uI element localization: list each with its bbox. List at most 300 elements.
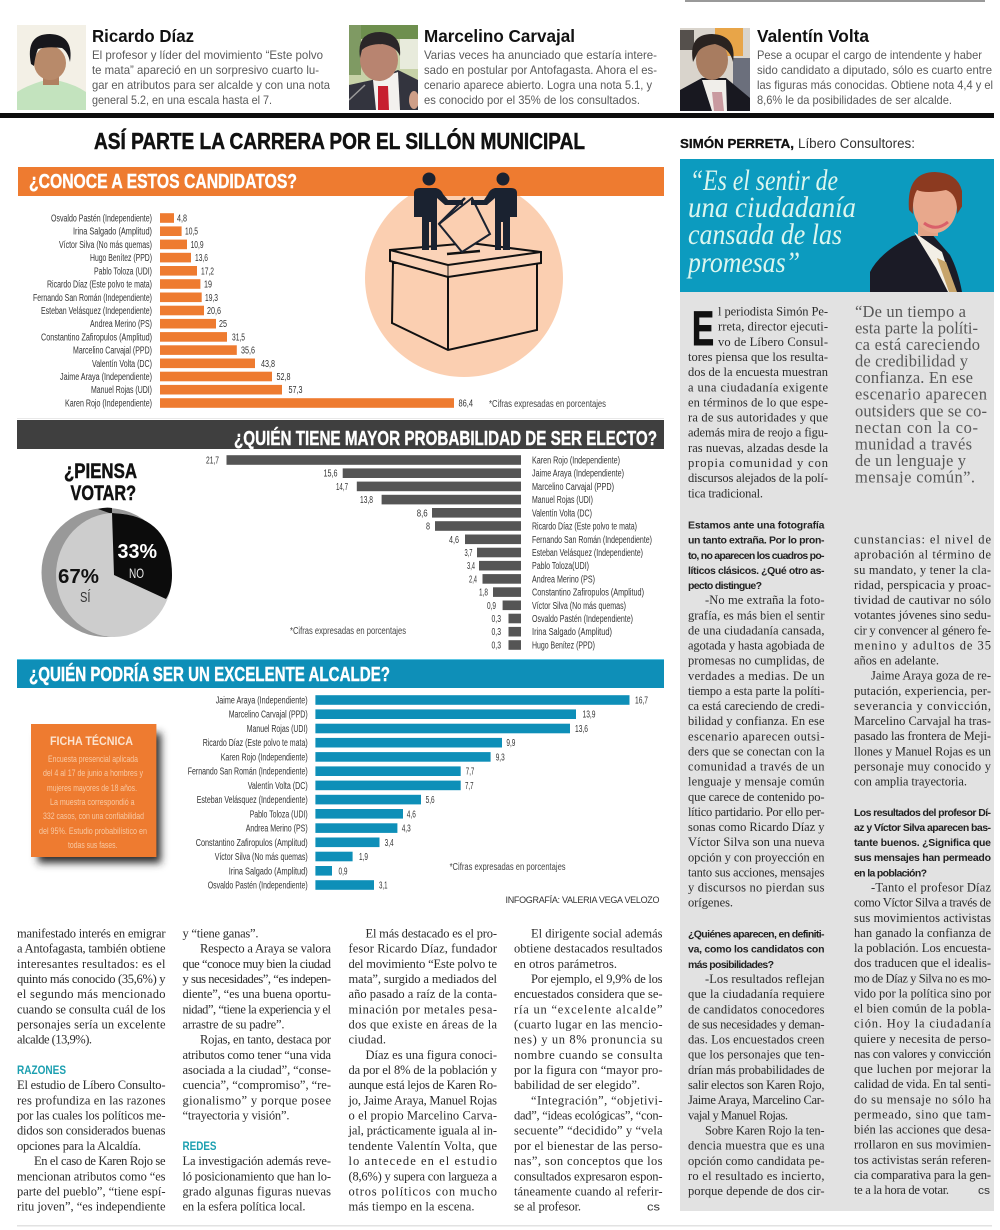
values: 4,3 [402,824,411,835]
candidate labels: Pablo Toloza (UDI) [250,809,308,820]
values: 14,7 [336,482,348,493]
article text: column 4: se al profesor. [514,1200,581,1214]
panel: conoce a estos candidatos [18,167,664,410]
article text: column 3: da por el 8% de la población y [348,1063,498,1077]
ficha text: Encuesta presencial aplicada [48,754,139,765]
interview column 2: como Víctor Silva a través de [854,896,991,910]
pie heading: VOTAR? [70,482,136,505]
candidate labels: Víctor Silva (No más quemas) [215,852,308,863]
article text: column 3: mata”, surgido a mediados del [348,972,498,986]
chart: ¿piensa votar? pie [42,460,172,637]
question and answer 1: lenguaje y mensaje común [688,775,825,789]
article text: column 1: cuando se consulta cuál de los [17,1002,166,1016]
article text: column 2: arrastre de su padre”. [182,1018,284,1032]
icon: ballot box with two people [390,172,541,350]
headline quote: cansada de las [688,218,842,251]
candidate labels [188,696,308,892]
interview column 2: la población. Los encuesta- [854,941,991,955]
section heading: ¿QUIÉN TIENE MAYOR PROBABILIDAD DE SER ELECTO? [234,427,657,450]
candidate labels: Irina Salgado (Amplitud) [532,627,612,638]
candidate labels: Ricardo Díaz (Este polvo te mata) [203,738,308,749]
interview column 2: -Tanto el profesor Díaz [871,880,991,894]
candidate labels: Jaime Araya (Independiente) [532,469,624,480]
candidate labels: Valentín Volta (DC) [532,508,592,519]
interview column 2: te a la hora de votar. [854,1183,949,1197]
article text: column 4: táneamente cuando al referir- [514,1184,662,1198]
candidate labels [33,214,152,410]
pull quote: ca está careciendo [855,335,980,354]
article text: column 4: dad”, “ideas ecológicas”, “con- [514,1109,662,1123]
interview column 2: nas con valores y convicción [854,1047,992,1061]
candidate labels: Hugo Benítez (PPD) [90,253,152,264]
question and answer 1: verdades a medias. De un [688,669,825,683]
ficha heading: FICHA TÉCNICA [50,733,133,748]
candidate labels: Osvaldo Pastén (Independiente) [51,214,152,224]
ficha text: La muestra correspondió a [50,797,135,808]
article text: column 2: y “tiene ganas”. [182,926,258,940]
values [206,456,501,652]
question and answer 1: opción y con proyección en [688,850,825,864]
intro paragraph: discursos alejados de la polí- [688,471,828,485]
interview column 2: putación, experiencia, per- [854,684,991,698]
pull quote: escenario aparecen [855,385,987,404]
article text: column 3: jal, prácticamente iguala al in- [348,1124,497,1138]
candidate labels: Irina Salgado (Amplitud) [73,227,152,238]
article text: column 1: parte del pueblo”, “tiene espí- [17,1184,166,1198]
article text: column 3: lo antecede en el estudio [348,1154,497,1168]
question and answer 2: Sobre Karen Rojo la ten- [705,1124,824,1138]
intro paragraph: tores piensa que los resulta- [688,350,828,364]
values: 43,8 [261,359,275,370]
candidate labels: Víctor Silva (No más quemas) [59,240,152,251]
question and answer 1: lítico partidario. Por ello per- [688,805,824,819]
interview column 2: calidad de vida. En tal senti- [854,1077,991,1091]
article text: column 2: “trayectoria y visión”. [182,1109,290,1123]
label: 67% sí [58,566,99,606]
photo: Valentín Volta [680,28,750,111]
footnote: *Cifras expresadas en porcentajes [290,626,406,637]
article text: column 4: por la figura con “mayor pro- [514,1063,662,1077]
interview column 2: severancia y convicción, [854,699,991,713]
values: 13,6 [575,724,588,735]
values: 17,2 [201,266,214,277]
article text: column 1 [17,926,166,1214]
values: 13,9 [582,710,596,721]
article text: column 3: jo, Jaime Araya, Manuel Rojas [348,1093,497,1107]
question and answer 1: agotada y hasta agobiada de [688,638,825,652]
profile: Marcelino Carvajal [349,25,657,110]
ficha text [39,754,147,851]
values [338,696,648,892]
interview column 2: cia comparativa para la gen- [854,1168,991,1182]
section header bar [17,420,664,449]
interview column 2: sus movimientos activistas [854,911,991,925]
article text: column 4: ría un “excelente alcalde” [514,1002,662,1016]
article text: column 2: diente”, “es una buena oportu- [182,987,331,1001]
article text: column 1: quinto más conocido (35,6%) y [17,972,166,986]
values: 8,6 [417,508,428,519]
description [92,48,330,107]
question and answer 1: ders que se conectan con la [688,744,825,758]
question and answer 1: tiempo a esta parte la políti- [688,684,824,698]
description: te mata” apareció en un sorpresivo cuarto lu- [92,63,319,77]
article text: column 2: gionalismo” y porque posee [182,1093,331,1107]
values: 13,6 [195,253,208,264]
question 3: az y Víctor Silva aparecen bas- [854,822,992,834]
interview column 2: con amplia trayectoria. [854,775,967,789]
profile: Ricardo Díaz [17,25,330,110]
question and answer 2: Jaime Araya, Marcelino Car- [688,1093,824,1107]
interview column 2: ridad, perspicacia y proac- [854,578,991,592]
question and answer 1: que carece de contenido po- [688,790,824,804]
end mark: cs [978,1185,991,1197]
intro paragraph: rreta, director ejecuti- [718,320,828,334]
candidate labels: Marcelino Carvajal (PPD) [532,482,614,493]
description: Pese a ocupar el cargo de intendente y haber [757,48,982,62]
interview column 2: personaje muy conocido y [854,759,992,773]
article text: column 2: que “conoce muy bien la ciudad [182,957,332,971]
interview column 2: pasado las frontera de Meji- [854,729,991,743]
article text: column 4: babilidad de ser elegido”. [514,1078,640,1092]
values: 9,9 [506,738,516,749]
interview column 2: llones y Manuel Rojas es un [854,744,992,758]
question and answer 1: orígenes. [688,896,733,910]
article text: column 1: alcalde (13,9%). [17,1033,92,1047]
headline quote: “Es el sentir de [690,164,838,197]
candidate labels: Pablo Toloza(UDI) [532,561,589,572]
bars [315,695,630,890]
candidate labels: Marcelino Carvajal (PPD) [73,346,152,357]
article text: column 4: consultados expresaron espon- [514,1169,662,1183]
candidate labels: Esteban Velásquez (Independiente) [197,795,308,806]
values: 86,4 [458,398,473,410]
panel: excelente alcalde [17,660,664,905]
interview column 2: que luchen por mejorar la [854,1062,991,1076]
candidate labels: Esteban Velásquez (Independiente) [532,548,643,559]
article text: column 4: por el bienestar de las perso- [514,1139,662,1153]
question and answer 2: drían más probabilidades de [688,1063,825,1077]
values: 10,9 [191,240,204,251]
values: 2,4 [469,574,477,585]
values: 0,3 [492,614,501,625]
interview column 2: Jaime Araya goza de re- [871,669,991,683]
question 1: líticos clásicos. ¿Qué otro as- [688,565,825,577]
bars [160,213,454,408]
pull quote: mensaje común”. [855,468,975,486]
pull quote: munidad a través [855,434,972,453]
photo: Marcelino Carvajal [349,25,419,110]
question 1 [688,520,825,592]
question and answer 2: das. Los encuestados creen [688,1033,825,1047]
candidate labels: Andrea Merino (PS) [532,574,595,585]
section header bar [17,660,664,688]
values: 31,5 [232,332,245,343]
footnote: *Cifras expresadas en porcentajes [489,399,606,410]
interview column 2: su mandato, y tener la cla- [854,563,991,577]
photo: Simón Perreta [870,172,963,292]
values: 5,6 [426,795,435,806]
question and answer 1: sonas como Ricardo Díaz y [688,820,825,834]
interview column 2: tividad de cautivar no sólo [854,593,991,607]
values: 52,8 [276,372,291,383]
article text: column 1: opciones para la Alcaldía. [17,1139,141,1153]
values: 19,3 [205,293,218,304]
candidate labels: Hugo Benítez (PPD) [532,640,595,652]
article text: column 4: encuestados considera que se- [514,987,662,1001]
profile: Valentín Volta [680,26,993,111]
question 2 [688,928,825,971]
candidate labels: Fernando San Román (Independiente) [188,767,308,778]
callout: ficha técnica [31,724,161,863]
values: 16,7 [635,696,648,706]
question 3: en la población? [854,867,927,879]
question and answer 2: que los personajes que ten- [688,1048,824,1062]
article text: column 3: otros políticos con mucho [348,1184,497,1198]
values: 20,6 [207,306,221,317]
article text: column 4: (cuarto lugar en las mencio- [514,1018,662,1032]
description [424,48,657,107]
label: 33% no: NO [129,565,144,581]
drop cap: E [692,303,714,356]
question 2: más posibilidades? [688,959,774,971]
question and answer 1: promesas no cumplidas, de [688,654,825,668]
article text: column 1: personajes sería un excelente [17,1018,166,1032]
description: Varias veces ha anunciado que estaría intere- [424,48,657,62]
interview column 2: años en adelante. [854,654,939,668]
article text: column 3 [348,926,498,1214]
question and answer 1: tanto sus acciones, mensajes [688,866,825,880]
section heading: ¿CONOCE A ESTOS CANDIDATOS? [29,171,297,193]
sidebar heading: Simón Perreta [680,136,915,151]
description: es conocido por el 35% de los consultados. [424,93,640,107]
question and answer 2: opción como candidata pe- [688,1154,824,1168]
pie heading [64,460,137,505]
question and answer 2 [688,928,825,1198]
interview column 2: Marcelino Carvajal ha tras- [854,714,991,728]
values: 15,6 [324,469,338,480]
pull quote: confianza. En ese [855,368,973,387]
article text: column 1: manifestado interés en emigrar [17,926,166,940]
name: Valentín Volta [757,26,869,46]
label: 33% no: 33% [118,541,157,563]
question and answer 1: de una ciudadanía cansada, [688,623,824,637]
description: sido candidato a diputado, sólo es cuarto entre [757,63,992,77]
interview column 2: bién las acciones que desa- [854,1122,991,1136]
values: 0,3 [492,640,501,652]
title: ASÍ PARTE LA CARRERA POR EL SILLÓN MUNICIPAL [94,127,585,154]
values: 7,7 [466,767,475,778]
label: 33% no [118,541,157,581]
article text: column 1: por las cuales los políticos me- [17,1109,166,1123]
article text: column 1: a Antofagasta, también obtiene [17,942,166,956]
article text: column 2: asociada a la ciudad”, “conse- [182,1063,331,1077]
interview column 2: ción. Hoy la ciudadanía [854,1017,991,1031]
candidate labels: Víctor Silva (No más quemas) [532,601,626,612]
question and answer 1: ca está careciendo de credi- [688,699,824,713]
candidate labels: Constantino Zafiropulos (Amplitud) [196,838,308,849]
article text: column 3: Díaz es una figura conoci- [366,1048,497,1062]
article text: column 2: cuencia”, “compromiso”, “re- [182,1078,331,1092]
values: 0,3 [492,627,501,638]
article text: column 2: atributos como tener “una vida [182,1048,331,1062]
article text: column 1: En el caso de Karen Rojo se [34,1154,166,1168]
ficha text: del 4 al 17 de junio a hombres y [43,768,143,779]
candidate labels: Karen Rojo (Independiente) [221,752,308,763]
ficha text: 332 casos, con una confiabilidad [43,811,144,822]
article text: column 3: más tiempo en la escena. [348,1200,474,1214]
pull quote [855,302,987,486]
subheading: redes: REDES [182,1139,216,1153]
article text: column 3: dos que existe en áreas de la [348,1018,497,1032]
values: 9,3 [496,752,505,763]
candidate labels: Osvaldo Pastén (Independiente) [532,614,633,625]
article text: column 4: nas”, son conceptos que los [514,1154,663,1168]
question and answer 2: dencia muestra que es una [688,1139,825,1153]
article text: column 3: (8,6%) y supera con largueza a [348,1169,497,1183]
candidate labels: Jaime Araya (Independiente) [60,372,152,383]
article text: column 2: ló posicionamiento que han lo- [182,1169,331,1183]
values: 3,4 [467,561,475,572]
footnote: *Cifras expresadas en porcentajes [450,862,566,873]
article text: column 2 [182,926,332,1214]
candidate labels: Valentín Volta (DC) [92,359,152,370]
candidate labels: Manuel Rojas (UDI) [247,724,308,735]
article text: column 4: secuente” “decidido” y “vela [514,1124,663,1138]
question and answer 1: escenario aparecen outsi- [688,729,824,743]
question and answer 2: porque depende de dos cir- [688,1184,824,1198]
values: 10,5 [185,227,198,238]
intro paragraph: dos de la encuesta muestran [688,365,829,379]
candidate labels: Constantino Zafiropulos (Amplitud) [532,588,644,599]
article text: column 1: interesantes resultados: es el [17,957,166,971]
article text: column 2: en la esfera política local. [182,1200,306,1214]
question 3: sus mensajes han permeado [854,852,991,864]
values: 13,8 [360,495,373,506]
question 3: Los resultados del profesor Dí- [854,807,992,819]
values: 4,8 [177,214,187,224]
intro paragraph: ras nuevas, alzadas desde la [688,441,828,455]
ficha text: mujeres mayores de 18 años. [47,783,137,794]
question and answer 2: que la ciudadanía requiere [688,987,825,1001]
pull quote: de credibilidad y [855,352,969,371]
intro paragraph: en términos de lo que espe- [688,395,828,409]
article text: column 1: El estudio de Líbero Consulto- [17,1078,166,1092]
question and answer 2: salir electos son Karen Rojo, [688,1078,824,1092]
description: cenario aparece abierto. Logra una nota 5.1, y [424,78,652,92]
interview column 2: mo de Díaz y Silva no es mo- [854,971,991,985]
article text: column 2: La investigación además reve- [182,1154,331,1168]
article text: column 4: Por ejemplo, el 9,9% de los [531,972,663,986]
description [757,48,993,107]
candidate labels: Andrea Merino (PS) [246,824,308,835]
values: 1,8 [479,588,488,599]
candidate labels: Ricardo Díaz (Este polvo te mata) [47,280,152,290]
article text: column 4: en otros parámetros. [514,957,617,971]
article text: column 3: fesor Ricardo Díaz, fundador [348,942,498,956]
question and answer 1 [688,520,825,910]
candidate labels: Fernando San Román (Independiente) [33,293,152,304]
headline quote [686,164,856,279]
question 1: Estamos ante una fotografía [688,520,825,532]
article text: column 4 [514,926,663,1214]
pull quote: outsiders que se co- [855,401,987,420]
question and answer 1: Víctor Silva son una nueva [688,835,825,849]
candidate labels: Manuel Rojas (UDI) [532,495,593,506]
values: 0,9 [487,601,496,612]
article text: column 2: Respecto a Araya se valora [200,942,331,956]
subheading: razones: RAZONES [17,1063,66,1077]
interview column 2: han ganado la confianza de [854,926,991,940]
article text: column 3: tendente Valentín Volta, que [348,1139,497,1153]
candidate labels: Manuel Rojas (UDI) [91,385,152,396]
pull quote: “De un tiempo a [855,302,967,321]
candidate labels [532,456,652,652]
intro paragraph: l periodista Simón Pe- [718,304,828,318]
candidate labels: Valentín Volta (DC) [248,781,308,792]
section header bar [18,167,664,196]
values: 0,9 [338,866,348,877]
candidate labels: Constantino Zafiropulos (Amplitud) [41,332,152,343]
values: 1,9 [359,852,368,863]
description: gar en atributos para ser alcalde y con una nota [92,78,330,92]
article text: column 1: el segundo más mencionado [17,987,166,1001]
candidate labels: Andrea Merino (PS) [90,319,152,330]
article text: column 4: El dirigente social además [531,926,663,940]
values: 57,3 [288,385,303,396]
question and answer 1: grafía, es más bien el sentir [688,608,825,622]
interview column 2: dos traducen que el idealis- [854,956,991,970]
interview column 2 [854,532,992,1197]
interview column 2: cir y convencer al género fe- [854,623,991,637]
candidate labels: Ricardo Díaz (Este polvo te mata) [532,522,637,532]
values: 21,7 [206,456,219,466]
interview column 2: tos activistas serán referen- [854,1153,991,1167]
section heading: ¿QUIÉN PODRÍA SER UN EXCELENTE ALCALDE? [29,663,390,686]
candidate labels: Marcelino Carvajal (PPD) [229,710,308,721]
values: 3,1 [379,880,388,892]
article text: column 1: res profundiza en las razones [17,1093,166,1107]
question 2: ¿Quiénes aparecen, en definiti- [688,928,825,940]
label: 67% sí: 67% [58,566,99,588]
name: Marcelino Carvajal [424,26,575,46]
panel: interview body [680,292,994,1211]
bars [226,455,521,650]
end mark: cs [647,1202,661,1214]
article text: column 3: ciudad. [348,1033,386,1047]
headline quote: promesas” [686,246,800,279]
illustration background: peach circle [365,179,563,377]
pull quote: esta parte la políti- [855,318,978,338]
values: 35,6 [241,346,255,357]
question and answer 1: comunidad a través de un [688,760,825,774]
candidate labels: Jaime Araya (Independiente) [216,696,308,706]
description: 8,6% le da posibilidades de ser alcalde. [757,93,952,107]
credit: INFOGRAFÍA: VALERIA VEGA VELOZO [506,895,660,905]
article text: column 3: El más destacado es el pro- [366,926,497,940]
question and answer 2: -Los resultados reflejan [705,972,825,986]
values: 4,6 [449,535,459,546]
interview column 2: votantes jóvenes sino sedu- [854,608,991,622]
candidate labels: Irina Salgado (Amplitud) [229,866,308,877]
ficha text: todas sus fases. [68,840,118,851]
question and answer 1: bilidad y confianza. En ese [688,714,825,728]
sidebar heading: Simón Perreta: Líbero Consultores: [798,136,915,151]
interview column 2: permeado, sino que tam- [854,1107,991,1121]
article text: column 2: y sus necesidades”, “es indepen- [182,972,331,986]
intro paragraph: ra de sus autoridades y que [688,411,828,425]
interview column 2: rrollaron en sus movimien- [854,1138,991,1152]
intro paragraph: además mira de reojo a figu- [688,426,828,440]
